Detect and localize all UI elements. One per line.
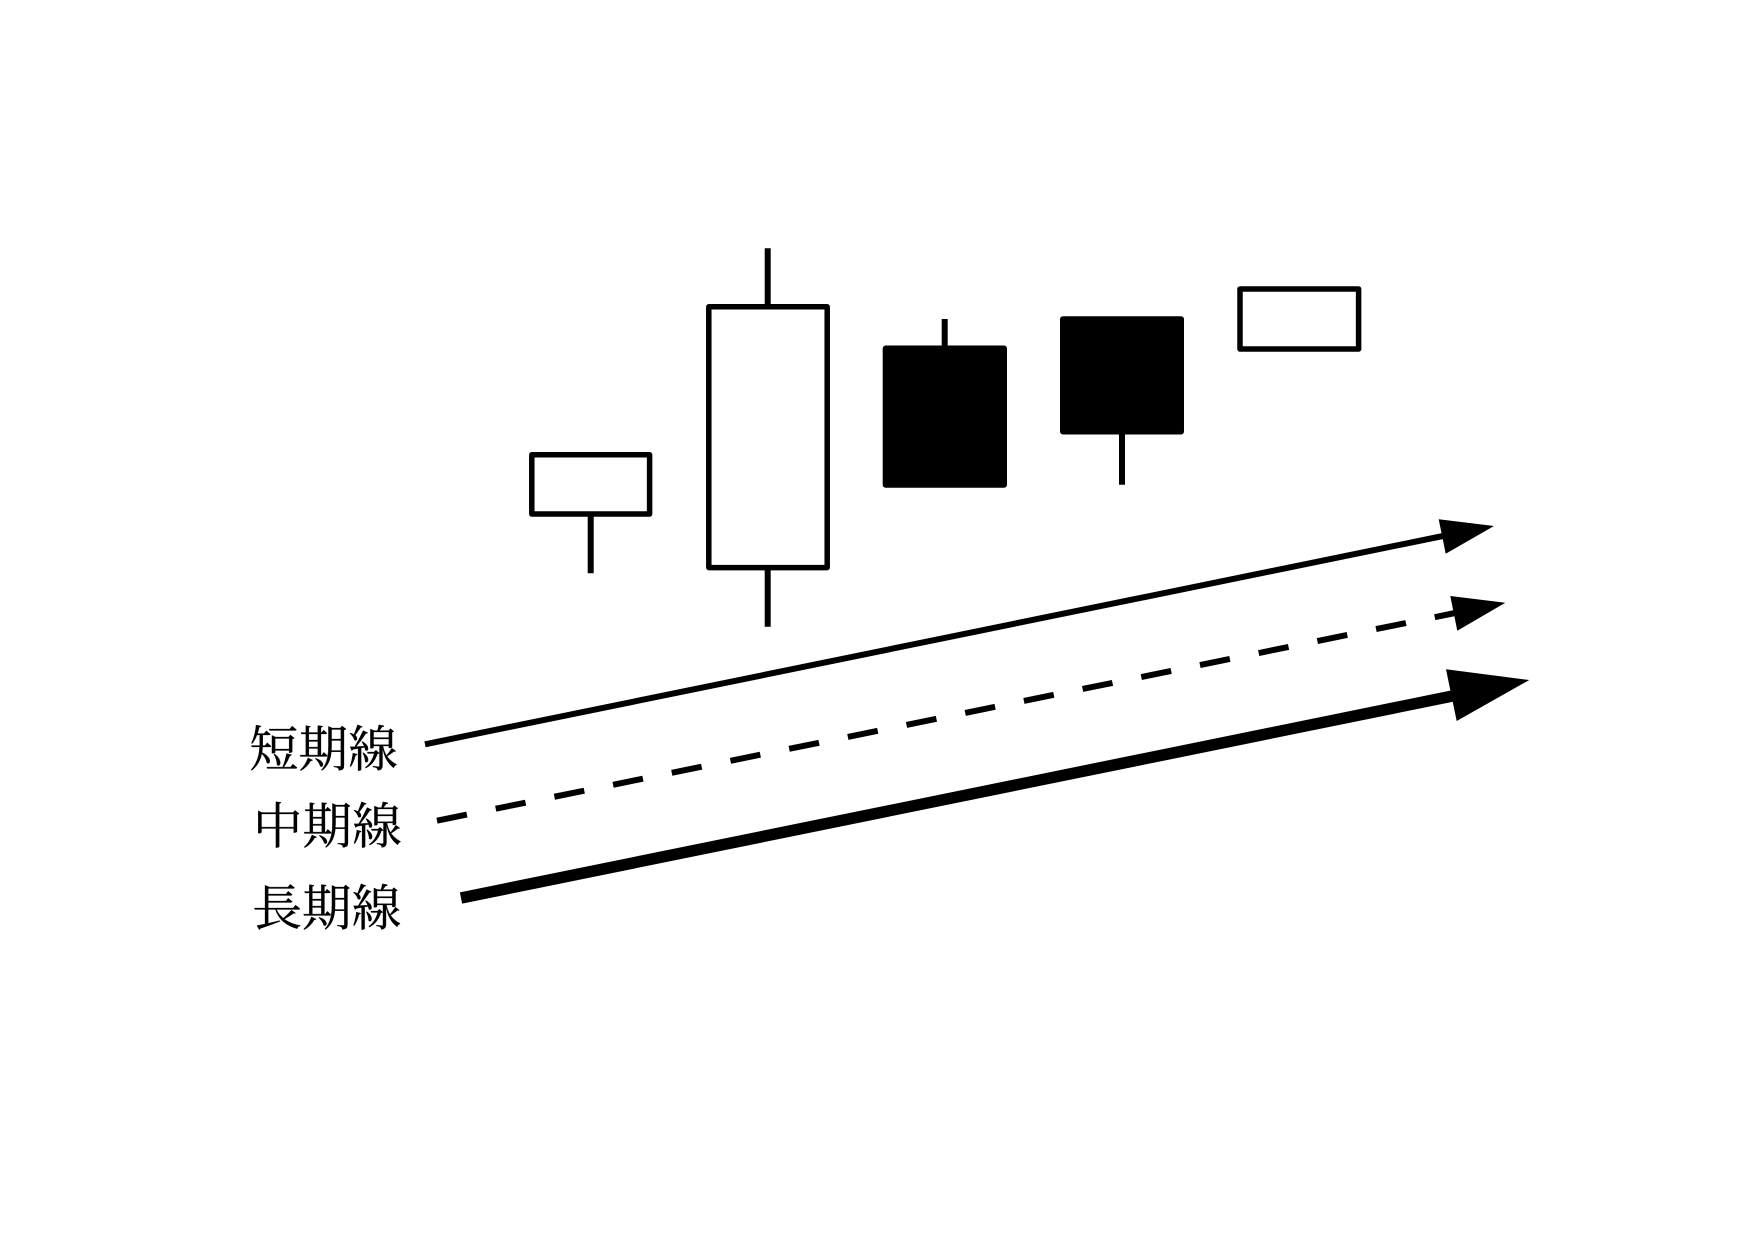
arrow: medium-term dashed line: [437, 596, 1505, 821]
candlestick 3: black with upper wick: [883, 319, 1007, 488]
label: medium-term line: 中期線: [253, 800, 402, 854]
arrow: long-term thick line: [461, 669, 1529, 898]
label: long-term line: 長期線: [252, 882, 401, 936]
arrow: short-term line: [425, 519, 1494, 744]
candlestick 1: white with lower wick: [532, 455, 650, 573]
label: short-term line: 短期線: [249, 722, 398, 778]
candlestick 4: black with lower wick: [1060, 316, 1184, 485]
candlestick 2: tall white with both wicks: [709, 248, 827, 627]
candlestick 5: white without wicks: [1240, 289, 1359, 349]
